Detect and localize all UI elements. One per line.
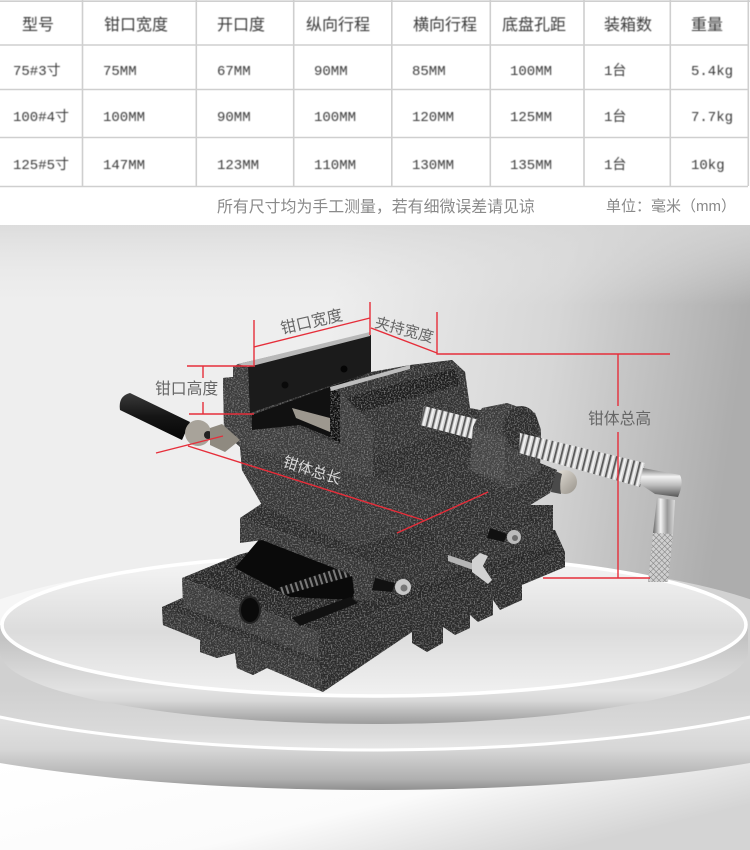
table header row: 底盘孔距: [502, 15, 566, 34]
hex bolt upper: [487, 528, 521, 544]
table row: 100#4寸: 100MM: [103, 110, 145, 126]
fixed jaw plate: [238, 332, 371, 413]
vise product photo: [120, 332, 682, 692]
table header row: 横向行程: [413, 16, 477, 34]
table row: 75#3寸: 75MM: [103, 64, 137, 80]
saddle and jaw silhouette: [223, 333, 557, 548]
label: jaw height: 钳口高度: [155, 380, 218, 398]
table row: 125#5寸: [13, 157, 725, 174]
base plate with lugs: [162, 552, 565, 692]
spec table: [0, 0, 750, 187]
left handle grip: [120, 393, 190, 440]
table row: 75#3寸: 75#3寸: [13, 63, 61, 80]
table header row: [22, 15, 723, 34]
lower tier: [0, 640, 750, 790]
table row: 75#3寸: 100MM: [510, 64, 552, 80]
screw boss: [470, 403, 541, 490]
lead-screw slot and spring: [235, 536, 360, 626]
photo backdrop: [0, 225, 750, 850]
table row: 75#3寸: 1台: [604, 63, 626, 80]
table row: 100#4寸: 125MM: [510, 110, 552, 126]
red dimension lines: [156, 302, 670, 578]
table row: 125#5寸: 110MM: [314, 158, 356, 174]
label: body height: 钳体总高: [588, 410, 651, 428]
table header row: 钳口宽度: [104, 16, 168, 34]
table row: 100#4寸: [13, 109, 733, 126]
moving jaw: [330, 360, 470, 458]
label: jaw width: 钳口宽度: [279, 306, 345, 338]
table row: 100#4寸: 7.7kg: [691, 110, 733, 126]
table header row: 重量: [691, 16, 723, 34]
table row: 125#5寸: 130MM: [412, 158, 454, 174]
measurement note: 所有尺寸均为手工测量，若有细微误差请见谅: [217, 198, 535, 216]
table row: 125#5寸: 125#5寸: [13, 157, 69, 174]
unit note: 单位：毫米（mm）: [606, 197, 736, 215]
hex bolt lower: [372, 578, 411, 595]
table row: 75#3寸: 5.4kg: [691, 64, 733, 80]
table row: 75#3寸: 67MM: [217, 64, 251, 80]
table header row: 纵向行程: [306, 16, 370, 34]
crank handle: [648, 498, 675, 582]
ball stop: [551, 470, 577, 494]
display podium: [0, 558, 750, 790]
table header row: 装箱数: [604, 16, 652, 34]
table row: 100#4寸: 1台: [604, 109, 626, 126]
table row: 75#3寸: 85MM: [412, 64, 446, 80]
moving jaw top edge: [330, 365, 410, 391]
table row: 125#5寸: 10kg: [691, 158, 725, 174]
middle slide block: [240, 500, 553, 600]
label: body length: 钳体总长: [281, 454, 343, 488]
table row: 100#4寸: 90MM: [217, 110, 251, 126]
table row: 75#3寸: [13, 63, 733, 80]
upper tier: [0, 554, 748, 724]
label: clamp width: 夹持宽度: [373, 314, 435, 346]
table row: 125#5寸: 1台: [604, 157, 626, 174]
fixed jaw block: [223, 365, 252, 430]
end cap hole: [240, 597, 260, 623]
jaw floor and slide rod: [252, 372, 371, 438]
left handle ball joint: [185, 420, 240, 452]
table header row: 开口度: [217, 16, 265, 34]
table row: 125#5寸: 147MM: [103, 158, 145, 174]
table row: 125#5寸: 135MM: [510, 158, 552, 174]
inner screw thread: [420, 406, 480, 440]
crank head: [640, 468, 682, 497]
table row: 100#4寸: 100MM: [314, 110, 356, 126]
table row: 100#4寸: 100#4寸: [13, 109, 69, 126]
table row: 75#3寸: 90MM: [314, 64, 348, 80]
outer lead screw: [519, 433, 645, 487]
lower slide block: [182, 525, 565, 660]
table row: 125#5寸: 123MM: [217, 158, 259, 174]
table row: 100#4寸: 120MM: [412, 110, 454, 126]
table header row: 型号: [22, 16, 54, 34]
wing bolt: [448, 553, 492, 584]
